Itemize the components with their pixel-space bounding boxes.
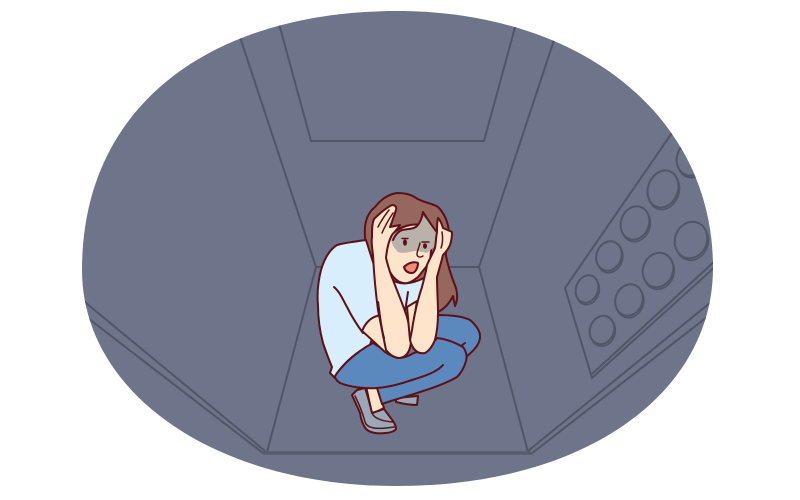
inner skin between arms (407, 301, 417, 340)
front shoe (352, 388, 396, 433)
elevator wall lines (80, 20, 716, 454)
right fingers (441, 232, 443, 248)
elevator button panel (565, 127, 716, 378)
right forearm and hand (410, 218, 452, 353)
face (384, 224, 433, 283)
left fingers (378, 210, 393, 233)
front foot (366, 386, 384, 414)
eye shadow (391, 216, 436, 253)
shoe sole line (355, 396, 394, 428)
shirt front (391, 278, 424, 335)
lashes and nose (402, 238, 429, 257)
shirt crease (334, 287, 363, 333)
back shoe (396, 396, 418, 405)
woman (318, 193, 480, 433)
front leg jeans (335, 338, 467, 404)
illustration: woman crouching in elevator (82, 11, 713, 486)
buttons (574, 146, 708, 346)
hair fringe line (393, 212, 436, 240)
left forearm and hand (372, 205, 411, 358)
elevator background blob (82, 11, 713, 486)
mouth (404, 262, 418, 273)
collar crease (405, 292, 408, 312)
upper arm elbow (362, 310, 411, 358)
eyes (403, 239, 407, 246)
jeans crease (377, 343, 465, 388)
hair (365, 193, 457, 312)
back leg jeans (430, 315, 480, 357)
arm crease (378, 302, 384, 338)
button shadows (578, 149, 710, 347)
shirt (318, 240, 385, 378)
